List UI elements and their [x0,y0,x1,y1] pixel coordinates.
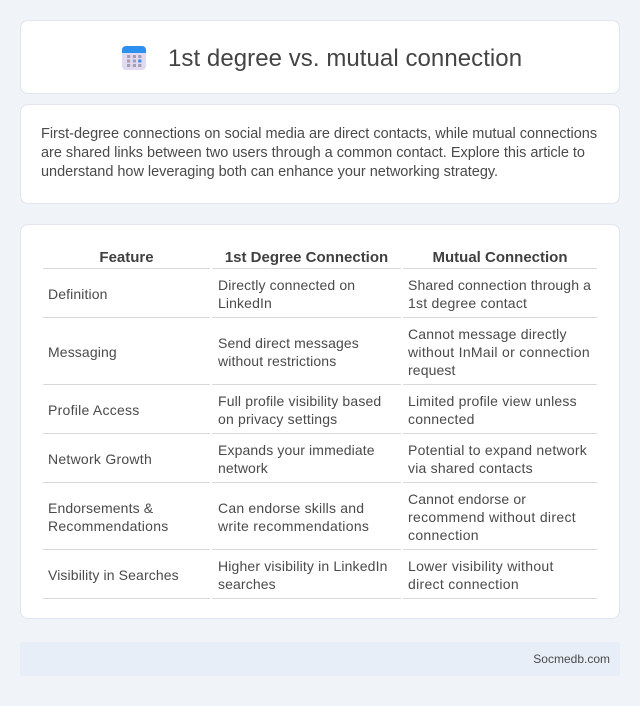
comparison table: Can endorse skills and [218,500,364,516]
header: mutual connection: Mutual Connection [432,249,568,266]
row: definition: Definition [48,286,108,302]
comparison table: connection [408,527,479,543]
comparison table: Lower visibility without [408,558,554,574]
comparison table: without restrictions [218,353,336,369]
comparison table: direct connection [408,576,519,592]
comparison table: Send direct messages [218,335,359,351]
comparison table: Shared connection through a [408,277,591,293]
row: profile access: Profile Access [48,402,140,418]
panel: comparison table [20,224,620,619]
comparison table: via shared contacts [408,460,533,476]
intro text [41,126,597,180]
intro text: understand how leveraging both can enhance your networking strategy. [41,164,498,180]
intro text: First-degree connections on social media are direct contacts, while mutual connections [41,126,597,142]
comparison table: Full profile visibility based [218,393,381,409]
panel: intro [20,104,620,204]
intro text: are shared links between two users through a common contact. Explore this article to [41,145,585,161]
comparison table: Expands your immediate [218,442,375,458]
comparison table: connected [408,411,475,427]
comparison table: Directly connected on [218,277,355,293]
row: messaging: Messaging [48,344,117,360]
row: endorsements: Endorsements & [48,500,153,516]
comparison table: request [408,362,456,378]
comparison table: 1st degree contact [408,295,527,311]
comparison table: LinkedIn [218,295,272,311]
comparison table: without InMail or connection [408,344,590,360]
comparison table: Cannot endorse or [408,491,526,507]
panel: title card [20,20,620,94]
footer bar [20,642,620,676]
icon: calendar [122,46,146,70]
row: network growth: Network Growth [48,451,152,467]
comparison table: Potential to expand network [408,442,587,458]
footer text: Socmedb.com [533,652,610,666]
comparison table: Cannot message directly [408,326,567,342]
comparison table: on privacy settings [218,411,337,427]
header: 1st degree connection: 1st Degree Connection [225,249,388,266]
comparison table: recommend without direct [408,509,576,525]
title: 1st degree vs. mutual connection [168,45,522,72]
row: visibility in searches: Visibility in Searches [48,567,179,583]
header: feature: Feature [99,249,154,266]
comparison table: write recommendations [218,518,369,534]
comparison table: Limited profile view unless [408,393,577,409]
comparison table: searches [218,576,276,592]
comparison table: network [218,460,268,476]
comparison table: Higher visibility in LinkedIn [218,558,388,574]
comparison table: Recommendations [48,518,168,534]
